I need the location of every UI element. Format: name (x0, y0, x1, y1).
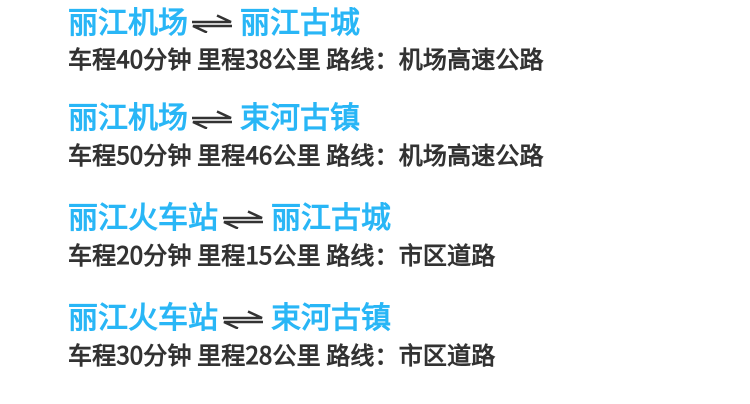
route block: airport to old town (68, 0, 544, 75)
icon: two-way arrow (223, 210, 263, 229)
origin heading: 丽江火车站 (68, 293, 218, 337)
origin heading: 丽江机场 (68, 93, 188, 137)
destination heading: 丽江古城 (271, 193, 391, 237)
icon: two-way arrow (223, 310, 263, 329)
route block: railway station to Shuhe (68, 293, 496, 371)
route details: 车程30分钟 里程28公里 路线：市区道路 (68, 336, 495, 371)
destination heading: 束河古镇 (240, 93, 360, 137)
icon: two-way arrow (192, 110, 232, 129)
route details: 车程50分钟 里程46公里 路线：机场高速公路 (68, 136, 544, 171)
route block: railway station to old town (68, 193, 496, 271)
route details: 车程20分钟 里程15公里 路线：市区道路 (68, 236, 495, 271)
origin heading: 丽江火车站 (68, 193, 218, 237)
route details: 车程40分钟 里程38公里 路线：机场高速公路 (68, 40, 544, 75)
route block: airport to Shuhe (68, 93, 544, 171)
icon: two-way arrow (192, 14, 232, 33)
destination heading: 束河古镇 (271, 293, 391, 337)
